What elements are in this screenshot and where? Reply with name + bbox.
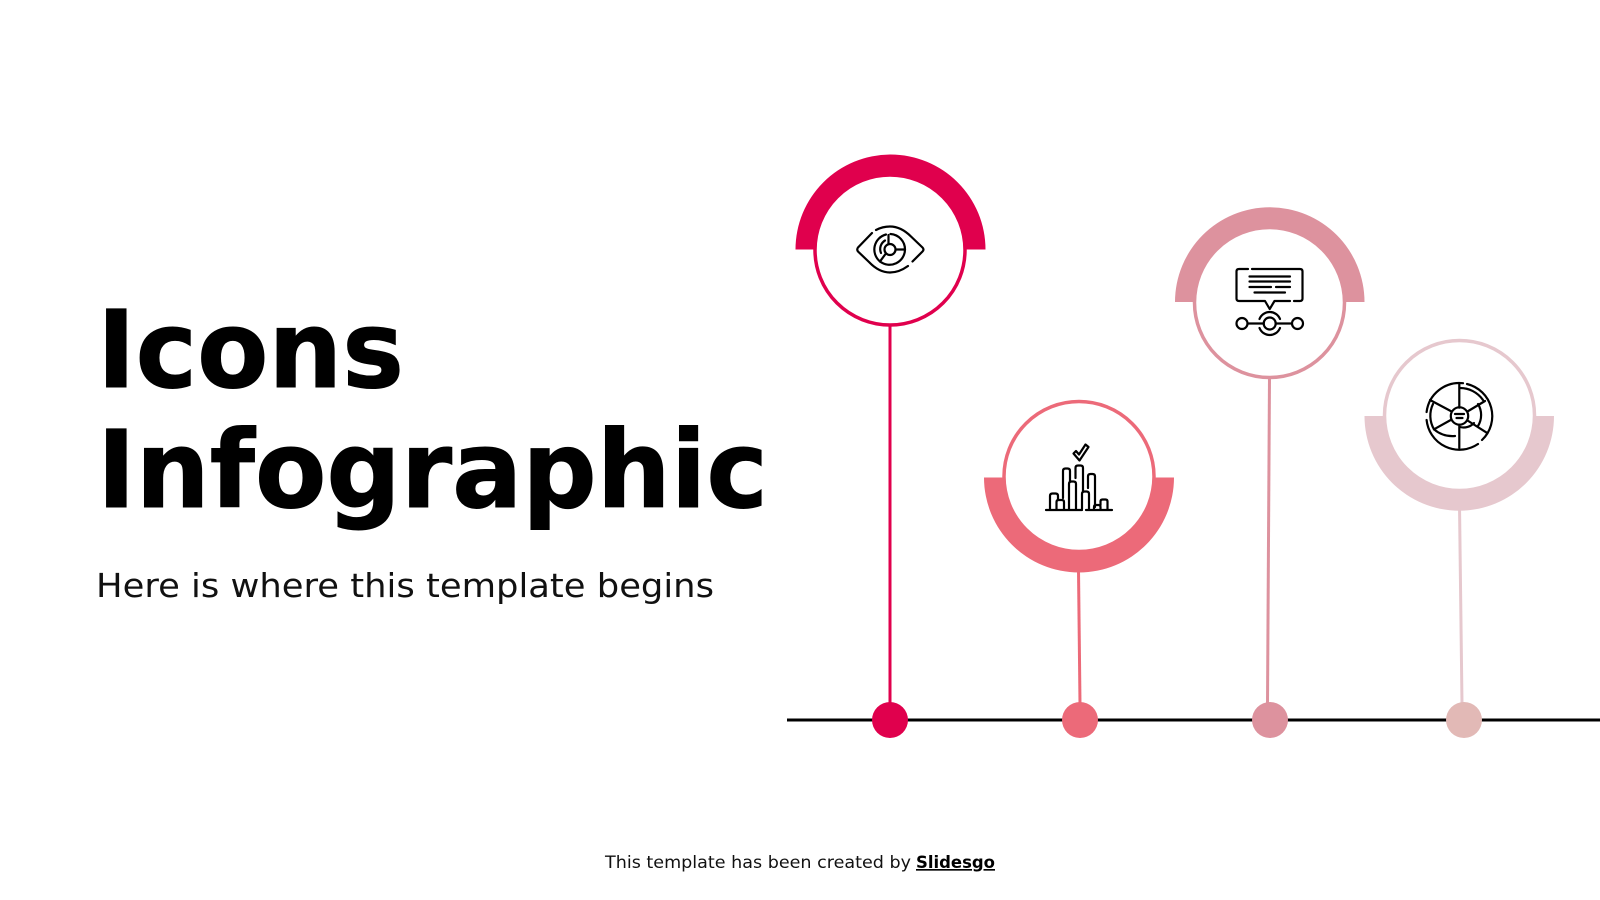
circle 4 bbox=[1384, 340, 1534, 490]
title: Icons bbox=[97, 289, 404, 413]
stem 4 bbox=[1460, 505, 1462, 704]
icon: eye bbox=[857, 226, 924, 272]
half ring 1 bbox=[796, 154, 986, 250]
dot 3 bbox=[1252, 702, 1288, 738]
circle 3 bbox=[1194, 228, 1344, 378]
circle 2 bbox=[1004, 402, 1154, 552]
half ring 4 bbox=[1364, 416, 1554, 511]
marker 1: eye bbox=[796, 154, 986, 704]
dot 1 bbox=[872, 702, 908, 738]
subtitle: Here is where this template begins bbox=[96, 567, 714, 605]
marker 4: radial wheel bbox=[1364, 340, 1554, 704]
footer credit: Slidesgo bbox=[916, 853, 995, 872]
stem 3 bbox=[1268, 376, 1270, 704]
dot 2 bbox=[1062, 702, 1098, 738]
timeline axis bbox=[787, 718, 1600, 722]
marker 3: speech bubble timeline bbox=[1175, 207, 1364, 704]
icon: radial wheel bbox=[1427, 383, 1492, 450]
footer credit: This template has been created by bbox=[604, 853, 911, 872]
dot 4 bbox=[1446, 702, 1482, 738]
circle 1 bbox=[815, 175, 965, 325]
half ring 3 bbox=[1175, 207, 1364, 302]
stem 1 bbox=[888, 324, 892, 704]
icon: bar chart with check bbox=[1046, 444, 1112, 510]
stem 2 bbox=[1078, 570, 1080, 704]
marker 2: bar chart bbox=[984, 402, 1174, 704]
half ring 2 bbox=[984, 478, 1174, 573]
icon: speech bubble timeline bbox=[1236, 269, 1303, 335]
title bbox=[97, 289, 768, 533]
title: Infographic bbox=[97, 409, 768, 533]
